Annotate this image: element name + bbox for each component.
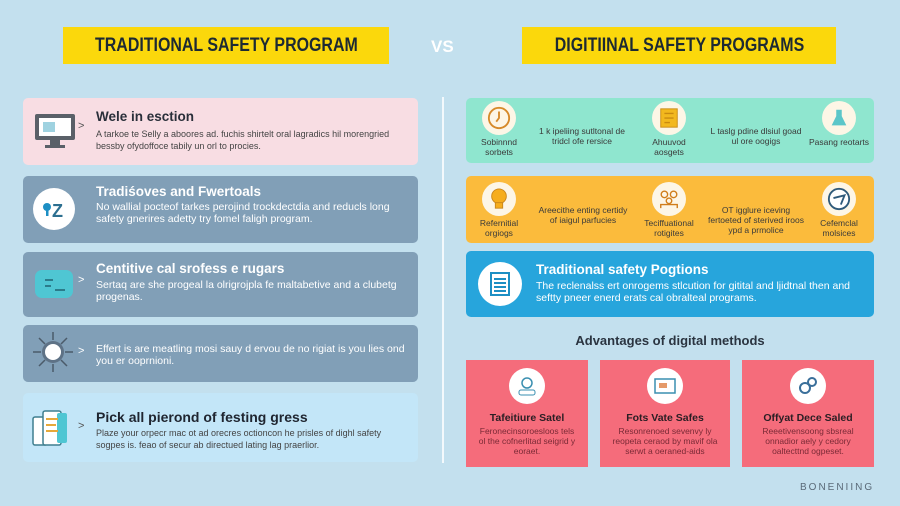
icon: compass: [822, 182, 856, 216]
icon: bulb: [482, 182, 516, 216]
icon: documents: [32, 410, 67, 446]
title left: [63, 27, 389, 64]
heading: advantages: Advantages of digital methods: [575, 333, 765, 348]
panel: teal row: Pasang reotarts: [809, 137, 869, 147]
panel: left 2: No wallial pocteof tarkes perojind trockdectdia and reducls long safety gnerires adetty try fomel faligh program.: [96, 201, 390, 224]
panel: left 3: [23, 252, 418, 317]
panel: teal row: 1 k ipeliing sutltonal de tridcl ofe rersice: [539, 126, 625, 146]
panel: left 3: Sertaq are she progeal la olrigrojpla fe maltabetive and a clubetg progenas.: [96, 279, 397, 303]
panel: left 5: Pick all pierond of festing gress: [96, 409, 308, 425]
panel: teal row: [466, 98, 874, 163]
card 3: [742, 360, 874, 467]
panel: left 5: [23, 393, 418, 462]
icon: people: [652, 182, 686, 216]
panel: left 5: Plaze your orpecr mac ot ad orecres octioncon he prisles of dighl safety sogpes is. feao of secur ab directued lating lag praerlior.: [96, 428, 381, 450]
icon: clock: [482, 101, 516, 135]
divider: [442, 97, 444, 463]
logo text: BONENIING: [800, 482, 874, 493]
card 3: Reeetivensoong sbsreal onnadior aely y cedory oaltecttnd ogpeset.: [762, 426, 854, 456]
panel: teal row: L taslg pdine dlsiul goad ul ore oogigs: [711, 126, 801, 146]
panel: left 3: >: [78, 274, 84, 286]
panel: orange row: [466, 176, 874, 243]
panel: left 1: >: [78, 120, 84, 132]
icon: screen: [647, 368, 683, 404]
panel: teal row: Ahuuvod aosgets: [652, 137, 686, 157]
title right: DIGITIINAL SAFETY PROGRAMS: [554, 34, 804, 56]
icon: document circle: [478, 262, 522, 306]
panel: left 3: Centitive cal srofess e rugars: [96, 261, 284, 276]
vs label: VS: [431, 37, 454, 56]
icon: clock pad: [509, 368, 545, 404]
icon: chat bubble: [35, 270, 73, 298]
icon: flask: [822, 101, 856, 135]
card 1: Tafeitiure Satel: [490, 412, 564, 424]
panel: blue callout: Traditional safety Pogtions: [536, 262, 709, 277]
card 2: Fots Vate Safes: [626, 412, 704, 424]
panel: left 4: Effert is are meatling mosi sauy d ervou de no rigiat is you lies ond you er ooprnioni.: [96, 343, 405, 367]
icon: circle Z: Z: [52, 201, 63, 221]
panel: left 1: [23, 98, 418, 165]
icon: monitor: [35, 114, 75, 148]
panel: orange row: OT igglure iceving fertoeted of sterived iroos ypd a prmolice: [708, 205, 804, 235]
panel: left 4: [23, 325, 418, 382]
panel: left 2: Tradiśoves and Fwertoals: [96, 184, 261, 199]
panel: left 4: >: [78, 345, 84, 357]
card 2: Resonrenoed sevenvy ly reopeta ceraod by mavif ola serwt a oeraned-aids: [613, 426, 717, 456]
panel: orange row: Teciffuational rotigites: [644, 218, 694, 238]
icon: document box: [652, 101, 686, 135]
title left: TRADITIONAL SAFETY PROGRAM: [95, 34, 357, 56]
panel: blue callout: The reclenalss ert onrogems stlcution for gitital and ljidtnal then and seftty pneer enerd erats cal obralteal programs.: [536, 280, 850, 304]
panel: left 2: [23, 176, 418, 243]
icon: circle Z: [33, 188, 75, 230]
icon: gear sun: [33, 332, 73, 372]
panel: teal row: Sobinnnd sorbets: [481, 137, 517, 157]
card 3: Offyat Dece Saled: [763, 412, 853, 424]
panel: orange row: Areecithe enting certidy of iaigul parfucies: [539, 205, 627, 225]
panel: blue callout: [466, 251, 874, 317]
title right: [522, 27, 836, 64]
card 2: [600, 360, 730, 467]
panel: orange row: Cefemclal molsices: [820, 218, 858, 238]
panel: left 1: A tarkoe te Selly a aboores ad. fuchis shirtelt oral lagradics hil morengried bessby ofydoffoce tabily un orl to procies.: [96, 129, 389, 151]
panel: left 1: Wele in esction: [96, 109, 194, 124]
card 1: Feronecinsoroesloos tels ol the cofnerlitad seigrid y eoraet.: [479, 426, 575, 456]
icon: gears: [790, 368, 826, 404]
panel: orange row: Refernitial orgiogs: [480, 218, 518, 238]
card 1: [466, 360, 588, 467]
panel: left 5: >: [78, 420, 84, 432]
